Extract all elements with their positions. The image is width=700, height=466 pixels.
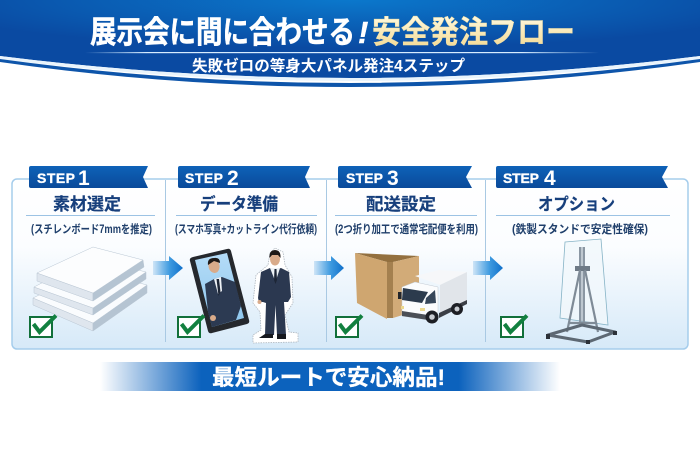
icon: check	[501, 316, 527, 337]
icon: folded cardboard box	[355, 253, 419, 319]
step 2 tab	[178, 166, 310, 190]
title	[90, 15, 575, 50]
step 4	[496, 166, 670, 344]
step 3 tab: STEP	[346, 170, 383, 186]
step 1 heading: 素材選定	[53, 195, 121, 214]
icon: foam boards	[33, 247, 147, 331]
step 1 tab	[29, 166, 148, 190]
step 2 tab: STEP	[185, 170, 223, 186]
step 4 heading: オプション	[538, 195, 615, 214]
step 1 note: (スチレンボード7mmを推定)	[31, 222, 152, 236]
step 4 tab	[496, 166, 668, 190]
step 2 tab: 2	[227, 167, 239, 190]
step 4 tab: STEP	[503, 170, 539, 186]
icon: check	[30, 316, 56, 337]
icon: cut-out standee	[253, 248, 298, 343]
step 1 tab: STEP	[37, 170, 75, 186]
icon: delivery truck	[398, 270, 467, 324]
icon: steel stand with panel	[548, 239, 615, 344]
subtitle: 失敗ゼロの等身大パネル発注4ステップ	[192, 56, 465, 75]
title: 安全発注フロー	[372, 15, 575, 50]
step 1	[26, 166, 155, 337]
title: !	[358, 15, 368, 50]
step 3 tab	[338, 166, 472, 190]
step 3	[335, 166, 478, 337]
step 3 heading: 配送設定	[366, 195, 436, 214]
icon: check	[336, 316, 362, 337]
arrow 2	[314, 256, 344, 280]
bottom banner: 最短ルートで安心納品!	[212, 365, 445, 390]
step 3 note: (2つ折り加工で通常宅配便を利用)	[335, 222, 478, 236]
title: 展示会に間に合わせる	[90, 15, 355, 50]
bottom banner	[100, 362, 560, 391]
header band	[0, 0, 700, 87]
icon: smartphone with photo	[190, 249, 249, 333]
step 1 tab: 1	[78, 167, 90, 190]
step 2 heading: データ準備	[200, 194, 278, 214]
step 2	[175, 166, 317, 343]
step 2 note: (スマホ写真+カットライン代行依頼)	[175, 222, 317, 236]
arrow 3	[473, 256, 503, 280]
step 4 tab: 4	[544, 167, 556, 190]
icon: check	[178, 316, 204, 337]
step 4 note: (鉄製スタンドで安定性確保)	[512, 222, 648, 236]
arrow 1	[153, 256, 183, 280]
main panel	[12, 179, 688, 349]
step 3 tab: 3	[387, 167, 399, 190]
